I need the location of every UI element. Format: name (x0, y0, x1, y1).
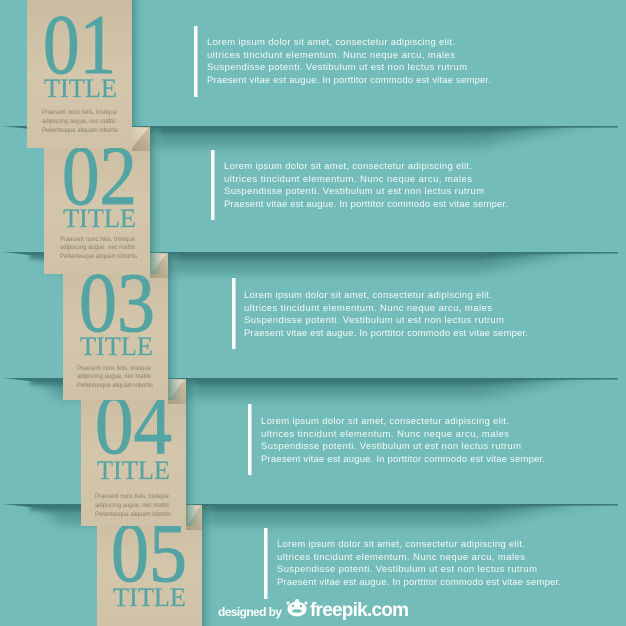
panel 4 (81, 378, 545, 526)
panel 1 (27, 0, 491, 148)
body text 5 (277, 539, 561, 588)
title 4: TITLE (97, 456, 170, 485)
title 1: TITLE (44, 74, 117, 103)
body text 5: Suspendisse potenti. Vestibulum ut est non lectus rutrum (277, 564, 537, 575)
title 5: TITLE (113, 583, 186, 612)
small text 1 (42, 110, 118, 134)
small text 4: Pellentesque aliquam lobortis (95, 512, 171, 518)
body text 3 (244, 290, 528, 339)
small text 2 (60, 237, 137, 260)
number 04: 04 (95, 378, 172, 472)
text bar 3 (232, 278, 236, 349)
panel 5 (97, 505, 561, 626)
number 01: 01 (43, 0, 116, 92)
body text 4: ultrices tincidunt elementum. Nunc neque arcu, males (261, 429, 509, 440)
card 2 fold (132, 127, 148, 148)
card 4 fold shade (168, 380, 186, 404)
card 5 fold shade (186, 506, 202, 530)
small text 3: adipiscing augue, nec mattis (77, 374, 151, 380)
body text 2: ultrices tincidunt elementum. Nunc neque arcu, males (224, 174, 472, 185)
card 4 fold (168, 379, 184, 401)
small text 4: Praesent nunc felis, tristique (95, 494, 170, 500)
band shadow 3 (3, 372, 618, 398)
small text 3 (77, 366, 153, 389)
card 2 fold shade (132, 128, 150, 151)
small text 2: Praesent nunc felis, tristique (60, 237, 136, 243)
small text 1: Pellentesque aliquam lobortis (42, 128, 118, 134)
body text 4 (261, 416, 545, 465)
body text 1: ultrices tincidunt elementum. Nunc neque arcu, males (207, 50, 455, 61)
card 5 shadow (202, 506, 216, 626)
small text 2: adipiscing augue, nec mattis (60, 245, 135, 251)
card 5 fold (186, 505, 200, 527)
card 3 shadow (168, 254, 182, 400)
body text 1: Praesent vitae est augue. In porttitor commodo est vitae semper. (207, 75, 491, 86)
number 05: 05 (111, 506, 187, 600)
text bar 1 (194, 26, 198, 97)
body text 5: Praesent vitae est augue. In porttitor commodo est vitae semper. (277, 577, 561, 588)
panel 3 (63, 253, 528, 400)
body text 1 (207, 37, 491, 86)
panel 2 (44, 127, 508, 274)
body text 3: Praesent vitae est augue. In porttitor commodo est vitae semper. (244, 328, 528, 339)
card 2 paper (44, 127, 150, 274)
freepik credit (218, 599, 409, 621)
band shadow 2 (3, 246, 618, 272)
designed by text: designed by (218, 605, 282, 619)
band shadow 1 (3, 120, 618, 146)
small text 3: Praesent nunc felis, tristique (77, 366, 152, 372)
card 4 shadow (186, 380, 200, 526)
body text 2 (224, 161, 508, 210)
number 02: 02 (62, 129, 137, 223)
body text 1: Lorem ipsum dolor sit amet, consectetur adipiscing elit. (207, 37, 455, 48)
text bar 4 (248, 404, 252, 475)
body text 5: ultrices tincidunt elementum. Nunc neque arcu, males (277, 552, 525, 563)
card 4 paper (81, 379, 186, 526)
card 1 paper (27, 0, 132, 148)
small text 1: adipiscing augue, nec mattis (42, 119, 116, 125)
icon: freepik mascot (286, 599, 308, 616)
body text 3: Suspendisse potenti. Vestibulum ut est non lectus rutrum (244, 315, 504, 326)
small text 2: Pellentesque aliquam lobortis (60, 254, 137, 260)
text bar 2 (211, 150, 214, 220)
body text 4: Praesent vitae est augue. In porttitor commodo est vitae semper. (261, 454, 545, 465)
body text 3: Lorem ipsum dolor sit amet, consectetur adipiscing elit. (244, 290, 492, 301)
small text 1: Praesent nunc felis, tristique (42, 110, 118, 116)
card 3 fold (150, 253, 166, 275)
band shadow 4 (3, 498, 618, 524)
title 2: TITLE (63, 204, 136, 233)
title 3: TITLE (80, 332, 153, 361)
body text 4: Lorem ipsum dolor sit amet, consectetur adipiscing elit. (261, 416, 509, 427)
body text 1: Suspendisse potenti. Vestibulum ut est non lectus rutrum (207, 62, 467, 73)
body text 2: Suspendisse potenti. Vestibulum ut est non lectus rutrum (224, 186, 484, 197)
card 3 fold shade (150, 254, 168, 278)
body text 2: Praesent vitae est augue. In porttitor commodo est vitae semper. (224, 199, 508, 210)
body text 3: ultrices tincidunt elementum. Nunc neque arcu, males (244, 303, 492, 314)
card 2 shadow (150, 128, 164, 274)
freepik.com text: freepik.com (310, 600, 409, 621)
card 3 paper (63, 253, 168, 400)
small text 3: Pellentesque aliquam lobortis (77, 383, 153, 389)
text bar 5 (264, 528, 268, 599)
body text 5: Lorem ipsum dolor sit amet, consectetur adipiscing elit. (277, 539, 525, 550)
number 03: 03 (79, 256, 155, 350)
small text 4: adipiscing augue, nec mattis (95, 503, 169, 509)
small text 4 (95, 494, 171, 518)
body text 4: Suspendisse potenti. Vestibulum ut est non lectus rutrum (261, 441, 521, 452)
card 1 shadow (132, 0, 146, 127)
card 5 paper (97, 505, 202, 626)
body text 2: Lorem ipsum dolor sit amet, consectetur adipiscing elit. (224, 161, 472, 172)
